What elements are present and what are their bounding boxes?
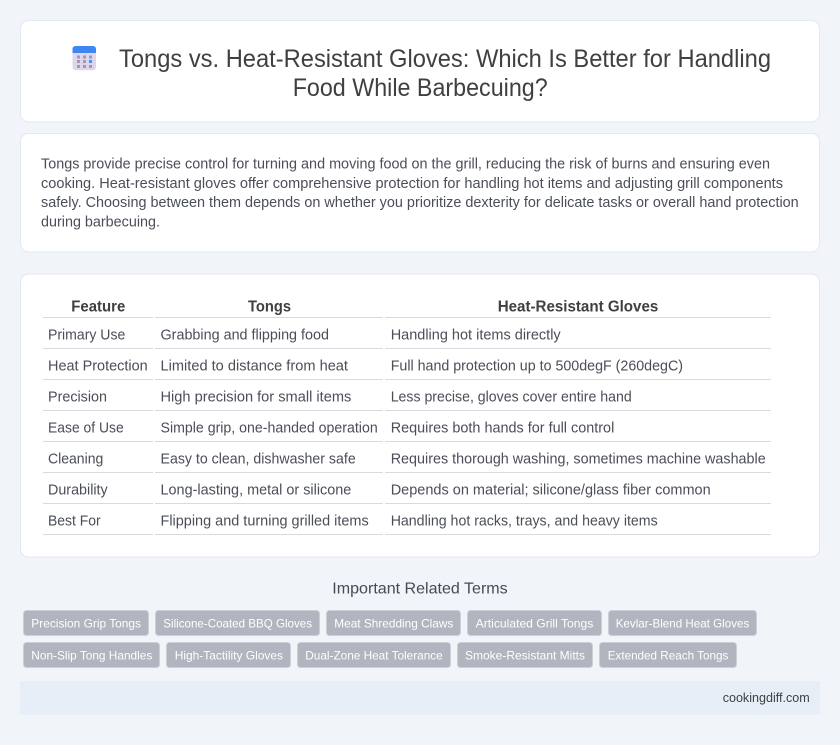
tag: Kevlar-Blend Heat Gloves: Kevlar-Blend Heat Gloves: [616, 616, 749, 630]
tag: Extended Reach Tongs: Extended Reach Tongs: [608, 648, 728, 662]
text block: introduction: cooking. Heat-resistant gloves offer comprehensive protection for handling hot items and adjusting grill components: [41, 176, 783, 192]
tag: Precision Grip Tongs: Precision Grip Tongs: [31, 616, 141, 630]
tag: Silicone-Coated BBQ Gloves: Silicone-Coated BBQ Gloves: [163, 616, 312, 630]
footer: site name: cookingdiff.com: [723, 690, 810, 705]
row: best for: Handling hot racks, trays, and heavy items: [391, 513, 658, 529]
row: cleaning: Cleaning: [48, 451, 103, 467]
tag: Kevlar-Blend Heat Gloves: [608, 610, 756, 636]
row: durability: [48, 482, 711, 498]
tag: Dual-Zone Heat Tolerance: Dual-Zone Heat Tolerance: [305, 648, 443, 662]
row: durability: Depends on material; silicone/glass fiber common: [391, 482, 711, 498]
text block: introduction: during barbecuing.: [41, 215, 160, 231]
row: primary use: [48, 327, 561, 343]
panel: title header: [20, 20, 820, 122]
row: best for: [48, 513, 658, 529]
tag: Non-Slip Tong Handles: [24, 642, 160, 668]
row: ease of use: Simple grip, one-handed operation: [160, 420, 378, 436]
panel: comparison table: [20, 274, 820, 557]
row: ease of use: Requires both hands for full control: [391, 420, 614, 436]
row: heat protection: [48, 358, 683, 374]
row: heat protection: Limited to distance from heat: [160, 358, 348, 374]
row: ease of use: [48, 420, 614, 436]
row: cleaning: Easy to clean, dishwasher safe: [160, 451, 356, 467]
title: [119, 45, 771, 102]
row: precision: High precision for small items: [160, 389, 351, 405]
text block: introduction: [41, 156, 799, 231]
tag: Articulated Grill Tongs: Articulated Grill Tongs: [476, 616, 593, 630]
footer: [20, 681, 820, 715]
row: durability: Long-lasting, metal or silicone: [160, 482, 351, 498]
heading: important related terms: Important Related Terms: [332, 580, 508, 597]
table header: Feature: [71, 299, 126, 316]
tag: Non-Slip Tong Handles: Non-Slip Tong Handles: [31, 648, 152, 662]
tag: Precision Grip Tongs: [24, 610, 148, 636]
row: primary use: Handling hot items directly: [391, 327, 561, 343]
tag: Extended Reach Tongs: [600, 642, 736, 668]
row: best for: Flipping and turning grilled items: [160, 513, 369, 529]
row: precision: Precision: [48, 389, 107, 405]
tag: Meat Shredding Claws: [326, 610, 460, 636]
row: durability: Durability: [48, 482, 108, 498]
tag: Articulated Grill Tongs: [468, 610, 602, 636]
title: Tongs vs. Heat-Resistant Gloves: Which Is Better for Handling: [119, 45, 771, 73]
tags: related terms: [24, 610, 756, 668]
tag: Smoke-Resistant Mitts: [458, 642, 592, 668]
icon: calendar: [72, 46, 96, 70]
panel: introduction: [20, 134, 820, 252]
tag: Dual-Zone Heat Tolerance: [298, 642, 450, 668]
table header: Tongs: [248, 299, 291, 316]
row: cleaning: Requires thorough washing, sometimes machine washable: [391, 451, 766, 467]
table header: [71, 299, 658, 316]
row: best for: Best For: [48, 513, 101, 529]
text block: introduction: safely. Choosing between them depends on whether you prioritize dexterity for delicate tasks or overall hand protection: [41, 195, 799, 211]
title: Food While Barbecuing?: [293, 74, 548, 102]
tag: Silicone-Coated BBQ Gloves: [156, 610, 320, 636]
tag: Smoke-Resistant Mitts: Smoke-Resistant Mitts: [465, 648, 585, 662]
row: precision: [48, 389, 632, 405]
table header: Heat-Resistant Gloves: [498, 299, 658, 316]
row: cleaning: [48, 451, 766, 467]
row: heat protection: Full hand protection up to 500degF (260degC): [391, 358, 683, 374]
row: primary use: Primary Use: [48, 327, 125, 343]
tag: Meat Shredding Claws: Meat Shredding Claws: [334, 616, 453, 630]
row: primary use: Grabbing and flipping food: [160, 327, 329, 343]
text block: introduction: Tongs provide precise control for turning and moving food on the grill, reducing the risk of burns and ensuring even: [41, 156, 770, 172]
row: precision: Less precise, gloves cover entire hand: [391, 389, 632, 405]
tag: High-Tactility Gloves: High-Tactility Gloves: [175, 648, 283, 662]
tag: High-Tactility Gloves: [166, 642, 290, 668]
row: heat protection: Heat Protection: [48, 358, 148, 374]
row: ease of use: Ease of Use: [48, 420, 124, 436]
